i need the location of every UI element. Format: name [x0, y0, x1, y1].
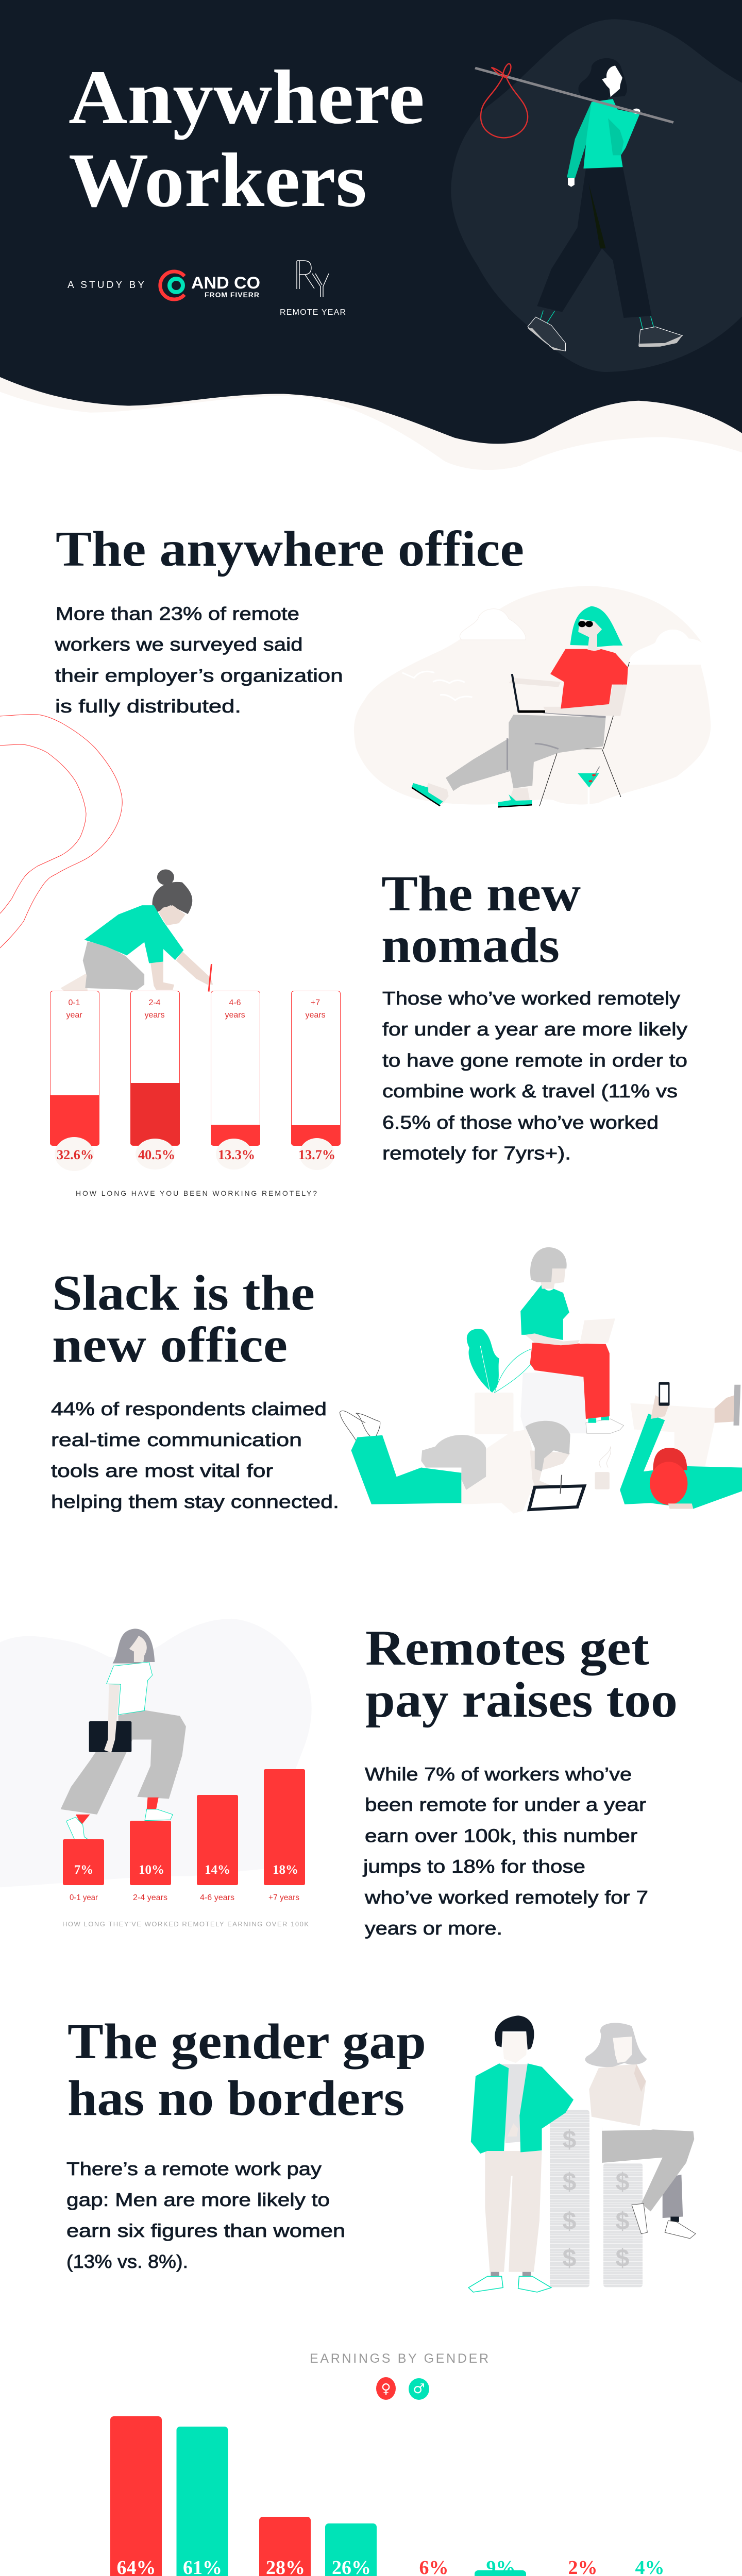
bar: 0-1 year: 32.6% — [57, 1147, 94, 1162]
body text: gap: Men are more likely to — [66, 2189, 330, 2210]
body text — [382, 988, 687, 1163]
bar chart: earning over 100k: 14% — [205, 1863, 230, 1877]
bar chart: earning over 100k: 18% — [273, 1863, 298, 1877]
bar: 4-6 years: 13.3% — [218, 1147, 255, 1162]
heading: nomads — [381, 918, 560, 973]
logos: study by — [68, 261, 346, 317]
heading: new office — [52, 1317, 288, 1373]
body text: combine work & travel (11% vs — [382, 1080, 678, 1101]
bar: 7+ years: 13.7% — [298, 1147, 335, 1162]
title — [69, 55, 425, 223]
header dark background — [0, 0, 742, 444]
chart caption: HOW LONG THEY'VE WORKED REMOTELY EARNING OVER 100K — [62, 1920, 309, 1928]
heading — [365, 1620, 678, 1728]
illustration: woman climbing — [61, 1629, 186, 1840]
panel: gender gap — [66, 2014, 696, 2292]
body text: earn six figures than women — [66, 2220, 345, 2241]
background blob — [0, 1619, 312, 1887]
bar: 2-4 years: years — [144, 1011, 165, 1020]
bar chart: how long remote — [50, 991, 341, 1197]
legend: gender icons: ♂ — [413, 2381, 425, 2397]
bar: 2-4 years: 2-4 — [148, 998, 161, 1007]
illustration: kneeling woman — [61, 870, 213, 992]
body text — [363, 1764, 648, 1939]
coin stacks — [550, 2110, 643, 2287]
illustration: woman on chair — [354, 586, 711, 807]
bar: 7+ years: +7 — [311, 998, 320, 1007]
heading: The new — [381, 866, 581, 922]
bar: 4-6 years: years — [225, 1011, 245, 1020]
bar: 0-1 year — [50, 991, 99, 1171]
coin stacks: $ — [563, 2168, 577, 2196]
hero blob — [451, 19, 742, 372]
legend: gender icons: ♀ — [381, 2381, 391, 2397]
coin stacks: $ — [616, 2208, 630, 2235]
bar: 0-1 year: 0-1 — [68, 998, 80, 1007]
heading — [52, 1265, 315, 1373]
bar chart: earning over 100k: 10% — [139, 1863, 164, 1877]
body text: remotely for 7yrs+). — [382, 1143, 571, 1163]
body text — [51, 1398, 339, 1512]
heading: Slack is the — [52, 1265, 315, 1321]
body text: There’s a remote work pay — [66, 2158, 322, 2179]
figures — [468, 2015, 696, 2292]
body text: real-time communication — [51, 1429, 302, 1450]
body text: helping them stay connected. — [51, 1491, 339, 1512]
bar: 7+ years: years — [305, 1011, 326, 1020]
body text: tools are most vital for — [51, 1460, 273, 1481]
body text: to have gone remote in order to — [382, 1050, 687, 1071]
body text: who’ve worked remotely for 7 — [364, 1887, 648, 1908]
body text: While 7% of workers who’ve — [365, 1764, 632, 1785]
bar: 0-1 year: year — [66, 1011, 82, 1020]
body text: been remote for under a year — [365, 1794, 646, 1815]
bar chart: earning over 100k: +7 years — [268, 1893, 299, 1902]
title: Anywhere — [69, 55, 425, 140]
body text — [66, 2158, 345, 2272]
title: Workers — [69, 138, 367, 223]
body text: More than 23% of remote — [56, 603, 299, 624]
icon: walker with bindle — [475, 58, 682, 351]
bar: 7+ years — [291, 991, 341, 1170]
body text: earn over 100k, this number — [365, 1825, 637, 1846]
heading: pay raises too — [365, 1672, 678, 1728]
logos: study by: FROM FIVERR — [205, 291, 259, 299]
body text: for under a year are more likely — [382, 1019, 687, 1040]
panel: the new nomads — [50, 866, 687, 1197]
logos: study by: REMOTE YEAR — [280, 308, 346, 317]
coin stacks: $ — [563, 2245, 577, 2272]
coin stacks: $ — [563, 2126, 577, 2154]
heading: Remotes get — [365, 1620, 649, 1676]
logos: study by: AND CO — [191, 274, 260, 292]
decorative red contour lines — [0, 715, 122, 948]
chart title: EARNINGS BY GENDER — [310, 2351, 488, 2366]
body text: is fully distributed. — [55, 696, 241, 717]
panel: slack is the new office — [51, 1247, 742, 1514]
body text: 44% of respondents claimed — [51, 1398, 327, 1419]
legend: gender icons — [376, 2377, 429, 2400]
body text: their employer’s organization — [55, 665, 343, 686]
heading: has no borders — [68, 2071, 404, 2126]
panel: the anywhere office — [0, 521, 711, 948]
body text: (13% vs. 8%). — [66, 2251, 188, 2272]
bar chart: earning over 100k — [62, 1769, 309, 1928]
body text — [54, 603, 343, 717]
bar chart: earning over 100k: 4-6 years — [200, 1893, 234, 1902]
body text: jumps to 18% for those — [363, 1856, 585, 1877]
body text: Those who’ve worked remotely — [382, 988, 680, 1009]
heading — [381, 866, 581, 973]
coin stacks: $ — [616, 2168, 630, 2196]
logos: study by: A STUDY BY — [68, 280, 144, 291]
bar chart: earning over 100k: 7% — [74, 1863, 93, 1877]
bar chart: earning over 100k: 0-1 year — [70, 1893, 98, 1902]
illustration: man and woman with coin stacks — [468, 2015, 696, 2292]
heading: The gender gap — [68, 2014, 426, 2070]
bar: 4-6 years — [211, 991, 260, 1170]
body text: years or more. — [365, 1918, 502, 1939]
panel: header — [0, 0, 742, 470]
illustration: team working — [340, 1247, 742, 1514]
bar: 2-4 years: 40.5% — [138, 1147, 175, 1162]
panel: remotes get pay raises too — [0, 1619, 678, 1939]
bar: 4-6 years: 4-6 — [229, 998, 241, 1007]
coin stacks: $ — [616, 2245, 630, 2272]
header beige wave — [0, 376, 742, 470]
bar chart: earning over 100k: 2-4 years — [133, 1893, 167, 1902]
bars — [110, 2416, 676, 2576]
coin stacks: $ — [563, 2208, 577, 2235]
body text: workers we surveyed said — [54, 634, 302, 655]
values — [116, 2557, 665, 2576]
heading — [68, 2014, 426, 2126]
heading: The anywhere office — [56, 521, 524, 577]
body text: 6.5% of those who’ve worked — [382, 1112, 659, 1133]
chart caption: HOW LONG HAVE YOU BEEN WORKING REMOTELY? — [76, 1189, 317, 1197]
bar: 2-4 years — [130, 991, 180, 1170]
panel: earnings by gender chart — [110, 2351, 676, 2576]
